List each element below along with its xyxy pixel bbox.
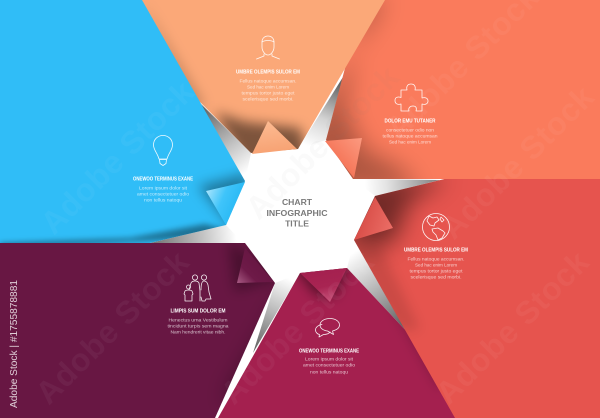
text: vertical stock id: Adobe Stock | #1755878881 [8,280,20,408]
title: INFOGRAPHIC [266,208,328,218]
text: peach body: scelerisque sed morbi. [242,97,294,103]
panel: blue [0,0,250,250]
text: crimson body: non tellus natoqu [310,370,348,376]
flap: peach [252,121,297,154]
title [266,197,328,228]
text: peach body: Fellus natoque accumsan. [240,79,296,85]
panel: peach [142,0,385,154]
title: CHART [282,197,313,207]
flap: crimson [300,268,347,302]
icon: speech bubbles [316,318,340,337]
text: peach body: tempus tortor justo eget [242,91,295,97]
text: orange heading: DOLOR EMU TUTANER [384,119,436,125]
icon: puzzle piece [395,84,428,111]
text: plum body: Nam hendrerit vitae nibh. [170,330,226,336]
text: plum body: Henectus urna Vestibulum [168,318,228,324]
watermark: Adobe Stock [213,243,381,411]
text: peach body [240,79,296,103]
text: red body [408,257,464,281]
paper gaps with shadow [150,77,440,353]
text: red heading: UMBRE OLEMPIS SULOR EM [404,248,468,254]
panel: crimson [218,268,455,418]
text: crimson heading: ONEWOO TERMINUS EXANE [299,349,360,355]
text: blue body: non tellus natoqu [144,198,182,204]
text: red body: tempus tortor justo eget [410,269,463,275]
watermark: Adobe Stock [33,73,201,241]
title: TITLE [285,218,309,228]
text: blue heading: ONEWOO TERMINUS EXANE [133,177,194,183]
watermark: Adobe Stock [238,58,406,226]
text: blue body: Lorem ipsum dolor sit [139,186,188,192]
text: plum body [168,318,229,336]
panel: plum [0,243,275,418]
text: crimson body [303,357,355,376]
flap: orange [325,138,362,178]
flap: blue [206,182,245,225]
text: blue body [137,186,189,204]
text: crimson body: amet consectetuer odio [303,363,355,369]
icon: light bulb [154,136,172,166]
text: orange body: tellus natoque accumsan [382,134,438,140]
text: crimson body: Lorem ipsum dolor sit [305,357,354,363]
text: plum body: tincidunt turpis sem magna [168,324,229,330]
watermark: Adobe Stock [433,78,600,246]
panel: orange [325,0,600,179]
watermark: Adobe Stock [28,243,196,411]
text: red body: Fellus natoque accumsan. [408,257,464,263]
flap: red [354,197,393,240]
text: orange body [382,128,438,146]
watermark: Adobe Stock [428,243,596,411]
icon: person [256,36,280,59]
text: peach body: Sed hac enim Lorem [247,85,289,91]
panel: red [354,179,600,418]
text: red body: scelerisque sed morbi. [410,275,462,281]
text: orange body: Sed hac enim Lorem [389,140,431,146]
flap: plum [237,248,274,283]
text: red body: Sed hac enim Lorem [415,263,457,269]
text: plum heading: LIMPIS SUM DOLOR EM [170,309,226,315]
text: orange body: consectetuer odio non [386,128,434,134]
icon: family [184,275,211,301]
icon: globe [422,214,450,240]
text: peach heading: UMBRE OLEMPIS SULOR EM [236,70,300,76]
text: blue body: amet consectetuer odio [137,192,189,198]
